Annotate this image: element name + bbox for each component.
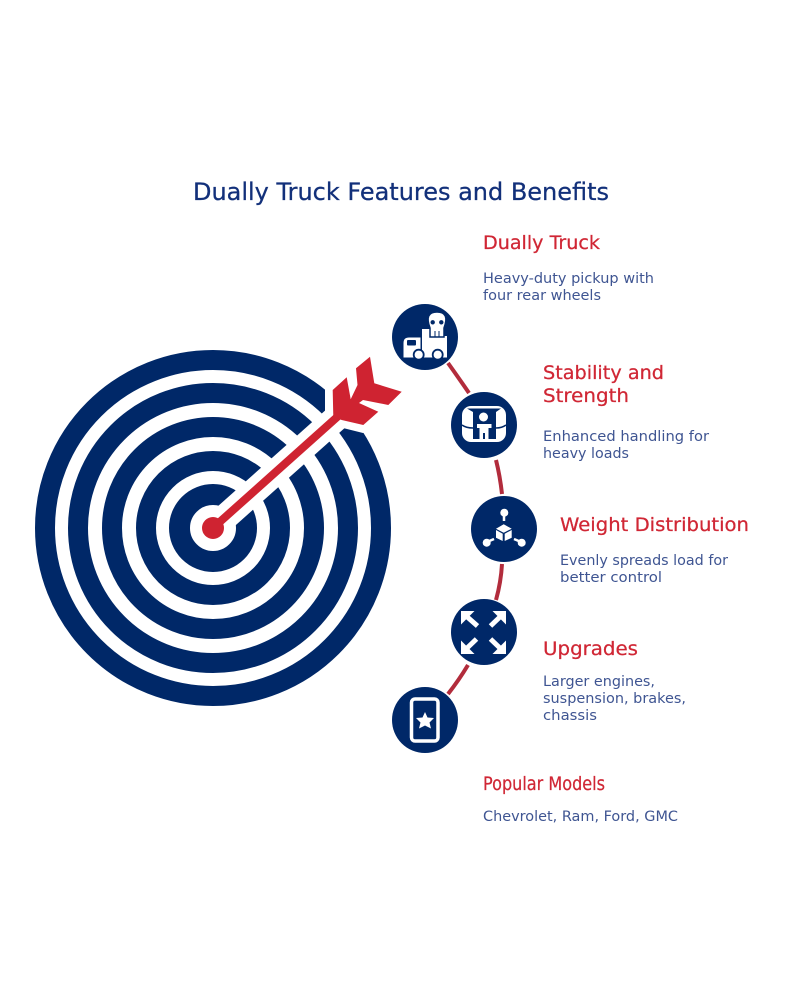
item: Stability and Strength: Stability and <box>543 362 664 384</box>
item: Dually Truck: four rear wheels <box>483 288 601 304</box>
item: Weight Distribution <box>560 514 749 586</box>
item: Upgrades: chassis <box>543 708 597 724</box>
item: Weight Distribution: Weight Distribution <box>560 514 749 536</box>
target with arrow <box>45 345 410 696</box>
target rings <box>45 360 381 696</box>
item: Stability and Strength: Enhanced handling for <box>543 429 709 445</box>
item: Dually Truck: Heavy-duty pickup with <box>483 271 654 287</box>
item: Popular Models <box>483 773 678 825</box>
item: Weight Distribution: better control <box>560 570 662 586</box>
item: Stability and Strength: Strength <box>543 385 629 407</box>
title: Dually Truck Features and Benefits <box>193 178 609 206</box>
icon: truck with skull <box>392 304 458 370</box>
item: Dually Truck <box>483 232 654 304</box>
icon: expand arrows <box>451 599 517 665</box>
item: Upgrades: suspension, brakes, <box>543 691 686 707</box>
icon: phone with star <box>392 687 458 753</box>
arrow gap <box>213 404 352 528</box>
item: Dually Truck: Dually Truck <box>483 232 600 254</box>
item: Popular Models: Chevrolet, Ram, Ford, GMC <box>483 809 678 825</box>
item: Upgrades: Larger engines, <box>543 674 655 690</box>
item: Popular Models: Popular Models <box>483 773 605 795</box>
item: Stability and Strength <box>543 362 709 462</box>
icon: box with distribution nodes <box>471 496 537 562</box>
connecting arc <box>448 363 502 694</box>
item: Stability and Strength: heavy loads <box>543 446 629 462</box>
arrow <box>202 357 402 539</box>
item: Upgrades: Upgrades <box>543 638 638 660</box>
icon: person in protective frame <box>451 392 517 458</box>
item: Weight Distribution: Evenly spreads load for <box>560 553 728 569</box>
item: Upgrades <box>543 638 686 724</box>
